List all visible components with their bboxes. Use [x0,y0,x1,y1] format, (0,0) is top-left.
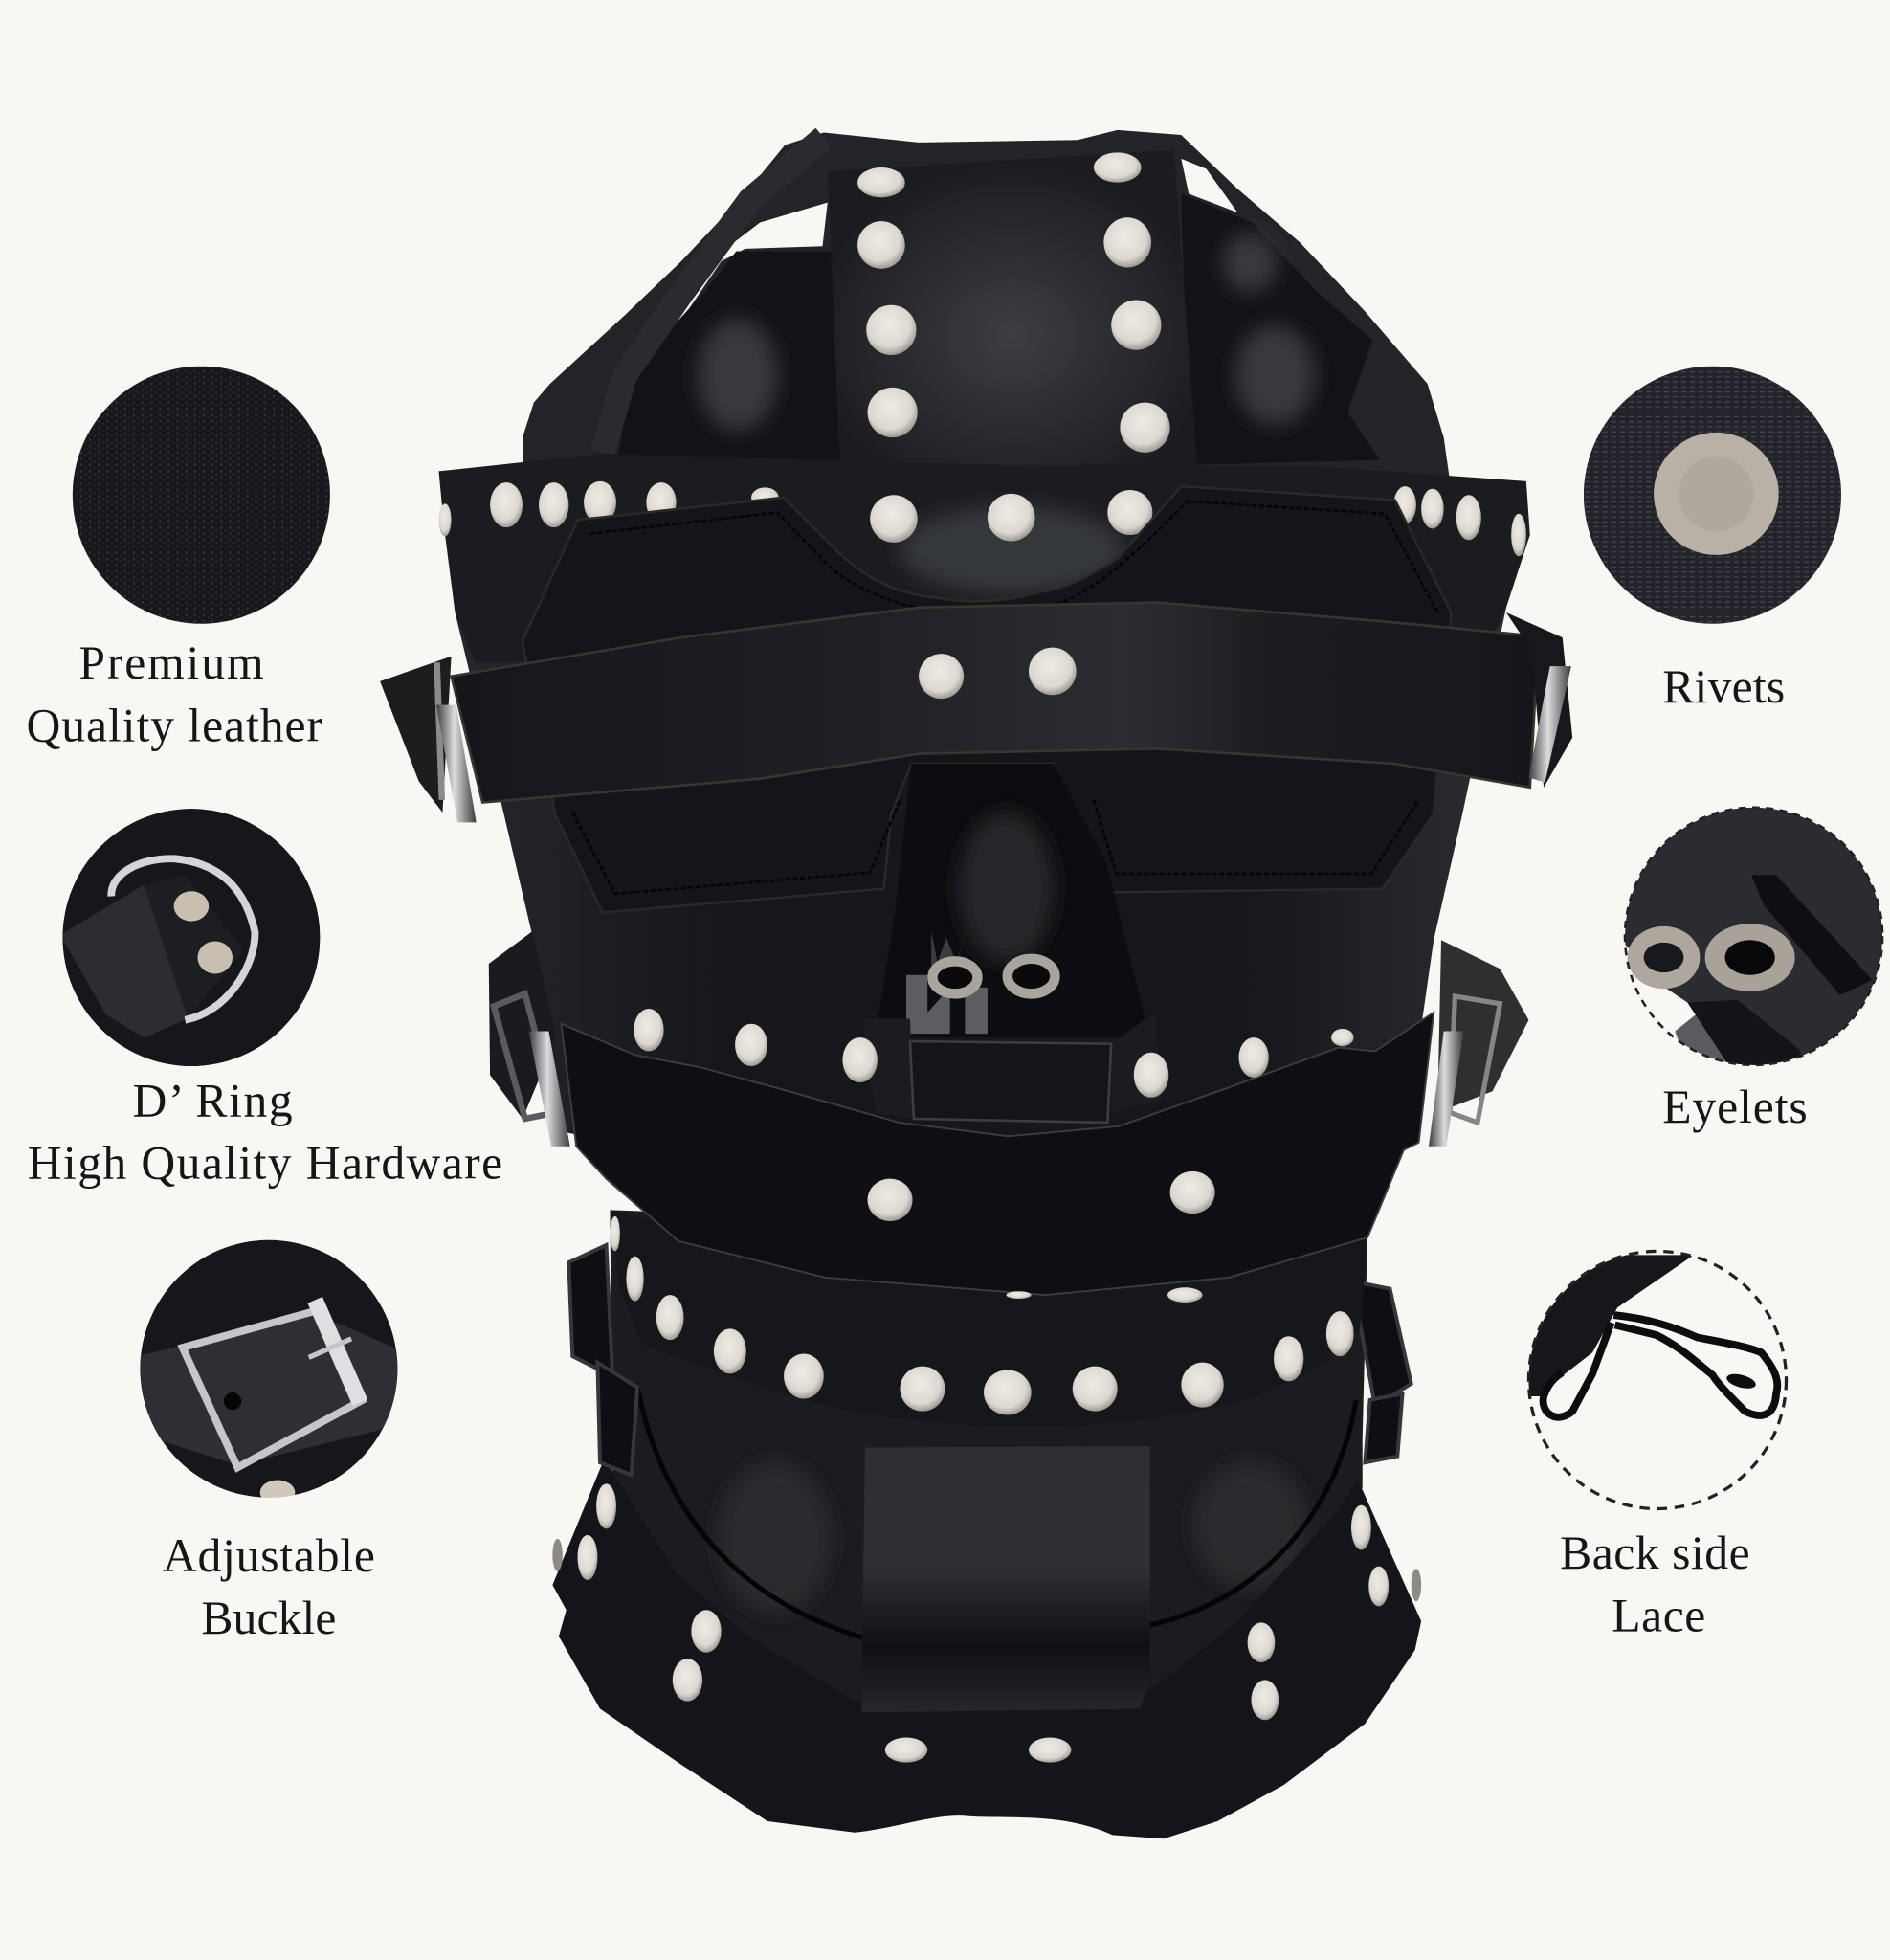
buckles [380,612,1572,1147]
caption [1560,1526,1750,1641]
photo: eyelets [1619,808,1882,1075]
caption: D’ Ring [133,1074,293,1126]
caption: Rivets [1662,660,1785,713]
photo: lace [1525,1255,1777,1417]
photo: leather texture [73,367,330,624]
caption: Back side [1560,1526,1750,1579]
left eye buckle [380,657,477,822]
nose eyelets [932,959,1055,993]
lower neck base [610,1210,1367,1715]
caption: Lace [1612,1589,1705,1641]
neck inner strap arcs [637,1388,1356,1637]
hood product photo [380,130,1572,1838]
side buckle frames [568,1245,1412,1475]
caption [27,636,323,752]
collar [552,1454,1421,1838]
feature: premium quality leather [27,367,330,752]
caption: Adjustable [163,1529,375,1582]
caption [28,1074,502,1190]
crown padding [617,193,1380,465]
left mouth buckle [494,993,570,1147]
right mouth buckle [1429,996,1500,1147]
watermark [906,931,988,1034]
caption: High Quality Hardware [28,1137,502,1190]
top vertical strap [828,150,1197,470]
background gaps around crown loop [665,159,1237,330]
photo: buckle [138,1240,400,1505]
brow band [439,454,1530,662]
crown padding highlights [698,233,1315,432]
chin strap [861,1446,1150,1712]
blindfold stitching [572,501,1437,894]
caption: Eyelets [1662,1080,1808,1133]
brow band highlight [900,506,1125,593]
feature: adjustable buckle [138,1240,400,1644]
face body [456,608,1506,1169]
caption: Buckle [201,1592,336,1644]
feature: back side lace [1525,1251,1787,1641]
caption: Premium [78,636,264,689]
photo: rivet [1584,367,1841,624]
feature: rivets [1584,367,1841,713]
blindfold panel [523,486,1451,912]
caption: Quality leather [27,700,323,752]
rivets [552,152,1421,1763]
brow rivets [439,481,1526,556]
dashed outline [1528,1251,1787,1508]
caption [163,1529,375,1644]
eye strap [452,603,1539,803]
feature: d ring [28,809,502,1190]
nose cover [875,764,1150,1037]
crown loop strap [603,138,824,453]
feature: eyelets [1619,808,1882,1133]
mouth side panels [862,1013,1163,1119]
photo: d ring [60,809,320,1066]
right eye buckle [1506,612,1572,788]
nose highlight [959,813,1054,963]
dashed outline [1625,808,1882,1065]
ear straps [489,931,1528,1119]
mouth strap [562,1013,1434,1295]
neck studded band [610,1210,1367,1427]
crown shell [523,130,1450,481]
mouth tab [910,1041,1111,1123]
neck padding highlights [719,1462,1306,1613]
